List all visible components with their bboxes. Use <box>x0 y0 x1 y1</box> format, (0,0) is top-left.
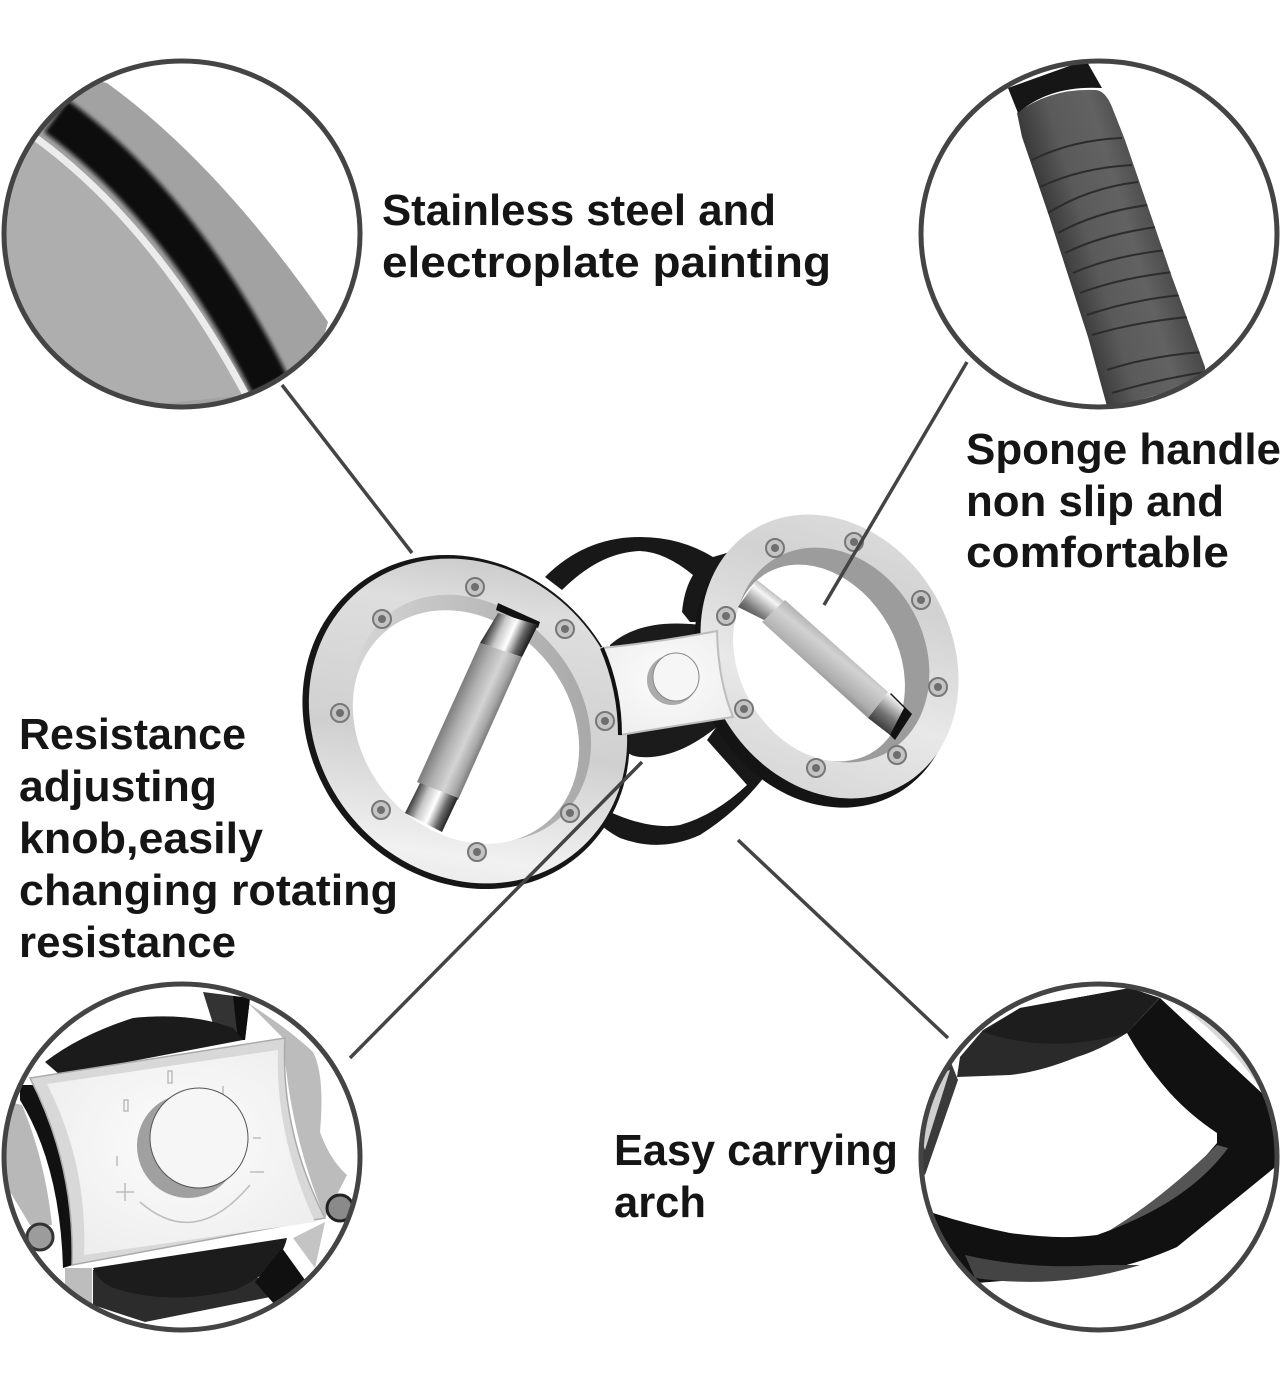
upper strap <box>203 992 250 1040</box>
rear black disc <box>45 1016 243 1075</box>
text: sponge handle <box>966 425 1281 577</box>
detail circle: resistance knob <box>0 984 360 1330</box>
right ring <box>643 467 1009 855</box>
left handle <box>496 603 540 628</box>
plate <box>30 1038 325 1265</box>
text: stainless steel: Stainless steel and <box>382 186 776 235</box>
text: resistance knob <box>19 710 398 967</box>
text: carrying arch <box>614 1126 898 1227</box>
bolts <box>27 1224 53 1250</box>
knob <box>137 1098 227 1198</box>
text: resistance knob: resistance <box>19 918 236 967</box>
text: sponge handle: comfortable <box>966 528 1229 577</box>
product: dual-ring resistance trainer <box>235 467 1009 956</box>
rear hub disc <box>610 624 725 757</box>
text: resistance knob: changing rotating <box>19 866 398 915</box>
upper arch <box>545 537 730 622</box>
steel ring pieces <box>248 1003 347 1218</box>
lower arch <box>598 722 768 845</box>
detail circle: stainless steel surface <box>0 60 360 420</box>
text: carrying arch: arch <box>614 1178 706 1227</box>
text: resistance knob: knob,easily <box>19 814 264 863</box>
connector line: steel detail <box>282 385 412 553</box>
text: carrying arch: Easy carrying <box>614 1126 898 1175</box>
text: resistance knob: adjusting <box>19 762 217 811</box>
connector line: handle detail <box>824 362 967 605</box>
connector line: knob detail <box>350 762 642 1058</box>
text: stainless steel: electroplate painting <box>382 238 831 287</box>
text: sponge handle: non slip and <box>966 477 1224 526</box>
text: stainless steel <box>382 186 831 287</box>
connector line: arch detail <box>738 840 948 1038</box>
text: sponge handle: Sponge handle <box>966 425 1281 474</box>
right handle <box>872 693 912 740</box>
text: resistance knob: Resistance <box>19 710 246 759</box>
left ring <box>235 488 697 956</box>
ring bolts <box>331 533 947 861</box>
detail circle: sponge handle <box>921 60 1277 410</box>
detail circle: carrying arch <box>915 984 1284 1330</box>
dial marks <box>116 1071 264 1222</box>
centre knob plate <box>602 631 733 735</box>
